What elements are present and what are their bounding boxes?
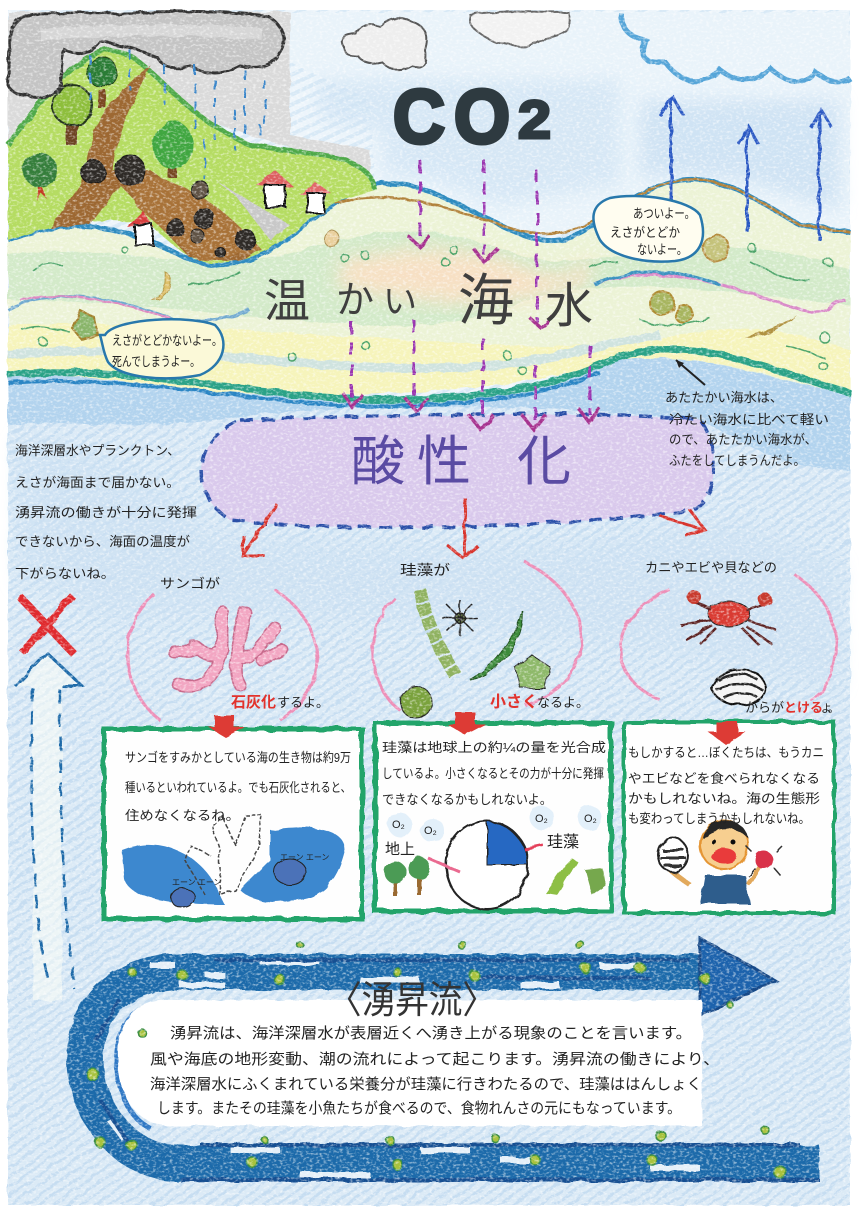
text: coral box: エーン エーン [280, 853, 329, 862]
text: diatom box: O₂ [424, 825, 437, 837]
callout: too hot: あついよー。 [633, 206, 695, 221]
label: smaller: なるよ。 [537, 695, 589, 710]
panel: box crabs [624, 722, 834, 913]
icon: nutrient dots on current [87, 941, 786, 1178]
panel: acidification blob [201, 414, 714, 527]
arrows: red block [208, 712, 746, 745]
icon: plankton and creatures in warm water [22, 231, 832, 374]
text: diatom box: O₂ [535, 813, 548, 825]
label: calcified [231, 694, 329, 711]
text: warm water note: ふたをしてしまうんだよ。 [669, 453, 805, 468]
label: shells dissolve: とける [784, 700, 823, 715]
text: diatom box: O₂ [584, 813, 597, 825]
icon: red X [20, 596, 74, 654]
heading: warm sea water: か [336, 280, 374, 322]
text: warm water note: あたたかい海水は、 [665, 390, 783, 405]
text: crab box: やエビなどを食べられなくなる [628, 771, 820, 786]
callout: too hot: えさがとどか [610, 225, 680, 240]
heading: warm sea water [264, 269, 593, 333]
text: diatom box [382, 740, 606, 858]
illustration: bleached coral with fish [122, 815, 345, 908]
callout: too hot [593, 196, 703, 262]
icon: diatoms [400, 590, 550, 718]
chart: one quarter pie [428, 821, 543, 909]
text: upwelling description: 海洋深層水にふくまれている栄養分が珪藻に行きわたるので、珪藻ははんしょく [150, 1076, 702, 1093]
label: smaller: 小さく [490, 693, 538, 711]
text: crab box [628, 745, 824, 826]
label: calcified: するよ。 [277, 695, 329, 710]
heading: acidification: 化 [517, 432, 571, 492]
panel: box diatoms [375, 723, 611, 911]
heading: warm sea water: 温 [264, 275, 310, 327]
arrows: CO2 into sea water [352, 160, 590, 425]
text: left note [15, 443, 197, 581]
label: shells dissolve: よ。 [821, 702, 839, 715]
icon: white cloud right [469, 12, 570, 46]
icon: trees [23, 57, 193, 200]
arrows: blue heat rising [660, 96, 832, 240]
heading: warm sea water: い [383, 283, 417, 321]
panel: warm sea water layer [8, 179, 850, 406]
heading: upwelling: 〈湧昇流〉 [328, 980, 496, 1022]
heading: warm sea water: 水 [545, 280, 593, 333]
text: diatom box: O₂ [392, 819, 405, 831]
heading: CO2 [393, 75, 551, 160]
text: crab box: もしかすると…ぼくたちは、もうカニ [628, 745, 824, 760]
circles: pink arcs [127, 562, 836, 720]
text: left note: えさが海面まで届かない。 [15, 475, 180, 490]
text: upwelling description: 湧昇流は、海洋深層水が表層近くへ湧き上がる現象のことを言います。 [170, 1025, 692, 1042]
icon: rain [90, 50, 265, 180]
text: diatom box: 地上 [385, 841, 415, 858]
label: coral: サンゴが [160, 576, 220, 591]
icon: crab [680, 590, 776, 646]
label: shells dissolve: からが [745, 700, 784, 715]
heading: warm sea water: 海 [458, 269, 514, 332]
text: coral box [125, 750, 351, 887]
label: diatoms: 珪藻が [400, 562, 450, 578]
text: diatom box: 珪藻は地球上の約¼の量を光合成 [382, 740, 606, 755]
icon: O2 bubbles and trees [384, 806, 605, 896]
illustration: child holding clam and crab [658, 821, 782, 904]
heading: acidification: 酸 [351, 432, 405, 492]
arrow: dashed upward arrow [15, 653, 82, 1000]
text: crab box: も変わってしまうかもしれないね。 [628, 811, 810, 826]
panel: sky [8, 12, 850, 235]
text: upwelling description: します。またその珪藻を小魚たちが食べるので、食物れんさの元にもなっています。 [157, 1100, 681, 1117]
text: coral box: エーン エーン [172, 878, 221, 887]
icon: houses [127, 170, 330, 245]
icon: blue heat cloud outline [622, 14, 850, 82]
arrowheads: purple [343, 236, 600, 430]
text: crab box: かもしれないね。海の生態形 [628, 791, 820, 806]
icon: pink coral [174, 612, 282, 686]
text: warm water note: 冷たい海水に比べて軽い [669, 412, 829, 427]
callout: too hot: ないよー。 [637, 242, 687, 257]
callout: no food: 死んでしまうよー。 [112, 354, 200, 369]
icon: white cloud left [342, 18, 427, 70]
label: calcified: 石灰化 [231, 694, 276, 711]
icon: clam [712, 669, 765, 705]
label: shells dissolve [745, 700, 839, 715]
panel: cold deep sea background [8, 351, 850, 1205]
text: upwelling description [150, 1025, 720, 1117]
text: left note: できないから、海面の温度が [15, 534, 190, 549]
text: warm water note: ので、あたたかい海水が、 [669, 432, 817, 447]
text: left note: 下がらないね。 [15, 566, 115, 581]
text: warm water note [665, 360, 829, 468]
panel: upwelling current band [85, 938, 820, 1180]
heading: CO2: C [393, 75, 445, 160]
heading: CO2: 2 [518, 90, 551, 150]
text: diatom box: できなくなるかもしれないよ。 [382, 792, 552, 807]
panel: box coral [104, 729, 362, 919]
callout: no food [100, 319, 223, 378]
icon: dirt clods [81, 155, 256, 257]
icon: grey rain cloud [8, 11, 284, 98]
text: coral box: サンゴをすみかとしている海の生き物は約9万 [125, 750, 351, 765]
text: coral box: 住めなくなるね。 [125, 808, 240, 823]
text: diatom box: しているよ。小さくなるとその力が十分に発揮 [382, 766, 604, 781]
text: diatom box: 珪藻 [547, 833, 579, 851]
arrows: red from blob [243, 498, 705, 558]
heading: CO2: O [454, 75, 510, 160]
panel: hill with landslide [8, 50, 375, 264]
label: smaller [490, 693, 589, 711]
callout: no food: えさがとどかないよー。 [112, 333, 222, 348]
label: crabs: カニやエビや貝などの [645, 560, 777, 575]
text: coral box: 種いるといわれているよ。でも石灰化されると、 [125, 780, 351, 795]
text: left note: 湧昇流の働きが十分に発揮 [15, 505, 197, 520]
heading: acidification: 性 [417, 432, 471, 492]
text: upwelling description: 風や海底の地形変動、潮の流れによって起こります。湧昇流の働きにより、 [150, 1051, 720, 1068]
heading: acidification [351, 432, 571, 492]
text: left note: 海洋深層水やプランクトン、 [15, 443, 180, 458]
